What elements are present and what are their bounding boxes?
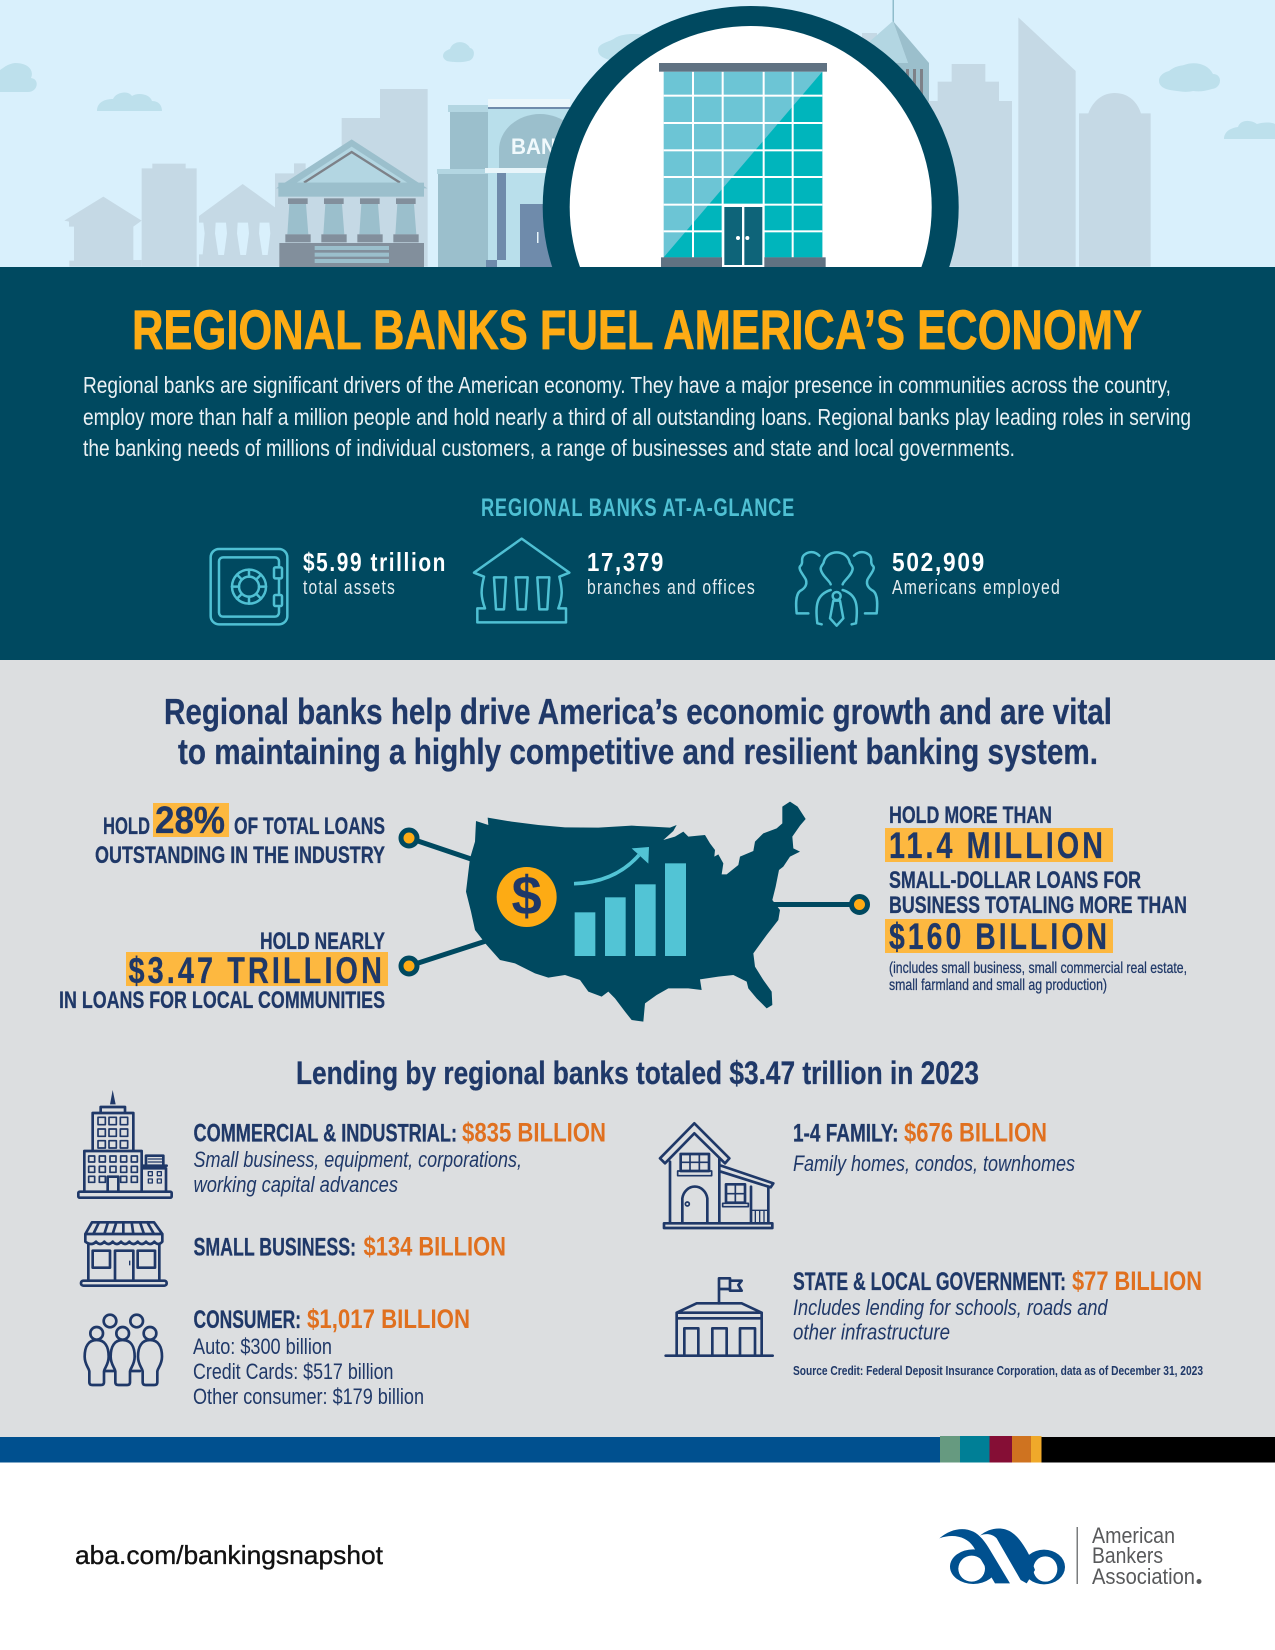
callout: 11.4 million small-dollar loans: small farmland and small ag production) [889, 977, 1107, 994]
icon: consumers [85, 1315, 162, 1385]
label: consumer: Auto: $300 billion [193, 1334, 332, 1359]
silhouettes: right buildings [928, 17, 1151, 267]
logo: American Bankers Association [939, 1523, 1202, 1589]
callout: 11.4 million small-dollar loans: HOLD MORE THAN [889, 802, 1052, 829]
label: consumer: Other consumer: $179 billion [193, 1384, 424, 1409]
icon: BANK building [437, 99, 581, 267]
callout: 28 percent: OF TOTAL LOANS [234, 813, 385, 840]
label: consumer: $1,017 BILLION [307, 1304, 470, 1334]
stat: total assets: $5.99 trillion [303, 547, 447, 577]
silhouettes: left buildings [64, 89, 428, 267]
icon: safe [211, 549, 287, 624]
callout: 11.4 million small-dollar loans: 11.4 MILLION [889, 825, 1106, 866]
icon: classical bank building [276, 139, 427, 267]
logo: American Bankers Association: Bankers [1092, 1543, 1163, 1568]
connector lines [401, 830, 868, 974]
callout: 11.4 million small-dollar loans: $160 BILLION [889, 916, 1110, 957]
label: consumer: Credit Cards: $517 billion [193, 1359, 394, 1384]
stat: branches [587, 547, 756, 599]
clouds [0, 34, 1275, 139]
icon: bank branch [474, 539, 569, 622]
panel: gray content [0, 660, 1275, 1437]
label: small business: $134 BILLION [364, 1232, 506, 1262]
label: state and local government: other infrastructure [793, 1320, 950, 1344]
label: state and local government: Includes lending for schools, roads and [793, 1295, 1108, 1320]
callout: 3.47 trillion: IN LOANS FOR LOCAL COMMUNITIES [59, 987, 385, 1014]
icon: BANK building: BANK [511, 134, 571, 159]
icon: office building [78, 1090, 172, 1198]
callout: 28 percent: 28% [155, 800, 225, 842]
stat: total assets: total assets [303, 577, 396, 599]
heading: lending total: Lending by regional banks totaled $3.47 trillion in 2023 [296, 1055, 979, 1091]
label: 1-4 family: 1-4 FAMILY: [793, 1120, 898, 1148]
label: commercial and industrial: COMMERCIAL & INDUSTRIAL: [194, 1120, 457, 1148]
icon: government building [666, 1278, 773, 1356]
circle frame [543, 6, 959, 408]
footer url: aba.com/bankingsnapshot [75, 1540, 384, 1570]
label: commercial and industrial: working capital advances [194, 1172, 398, 1197]
stat: total assets [303, 547, 447, 599]
stat: employed [892, 547, 1061, 599]
callout: 11.4 million small-dollar loans [885, 802, 1187, 994]
logo: American Bankers Association: American [1092, 1523, 1175, 1548]
label: commercial and industrial [194, 1118, 606, 1197]
callout: 11.4 million small-dollar loans: (includes small business, small commercial real estate, [889, 960, 1187, 977]
icon: glass office tower [659, 63, 827, 267]
label: consumer: CONSUMER: [194, 1306, 301, 1334]
icon: people [796, 552, 877, 626]
intro paragraph: the banking needs of millions of individual customers, a range of businesses and state and local governments. [83, 435, 1015, 461]
label: 1-4 family: $676 BILLION [904, 1118, 1047, 1148]
US map [466, 802, 806, 1022]
panel: dark intro band [0, 267, 1275, 660]
callout: 28 percent [95, 800, 385, 869]
heading: economic growth: to maintaining a highly competitive and resilient banking system. [178, 731, 1098, 772]
label: 1-4 family: Family homes, condos, townhomes [793, 1151, 1075, 1176]
stat: employed: 502,909 [892, 547, 986, 577]
callout: 3.47 trillion: HOLD NEARLY [260, 928, 385, 955]
callout: 3.47 trillion: $3.47 TRILLION [128, 950, 385, 991]
bar chart with growth arrow [574, 847, 686, 956]
color bar [0, 1436, 1275, 1462]
icon: dollar coin: $ [512, 864, 542, 926]
label: state and local government [793, 1266, 1202, 1344]
label: small business: SMALL BUSINESS: [194, 1234, 356, 1262]
intro paragraph [83, 372, 1191, 461]
panel: hero skyline [0, 0, 1275, 408]
icon: storefront [81, 1222, 167, 1286]
label: state and local government: $77 BILLION [1072, 1266, 1202, 1296]
label: state and local government: STATE & LOCAL GOVERNMENT: [793, 1268, 1066, 1296]
logo: American Bankers Association: Association [1092, 1564, 1195, 1589]
label: 1-4 family [793, 1118, 1075, 1176]
logo mark [939, 1529, 1065, 1584]
heading: economic growth [164, 691, 1112, 772]
icon: tower with spire [860, 0, 929, 105]
callout: 3.47 trillion [59, 928, 388, 1014]
label: commercial and industrial: Small business, equipment, corporations, [194, 1147, 522, 1172]
heading: at-a-glance: REGIONAL BANKS AT-A-GLANCE [481, 494, 795, 522]
callout: 28 percent: HOLD [103, 813, 150, 840]
callout: 28 percent: OUTSTANDING IN THE INDUSTRY [95, 842, 385, 869]
label: consumer [193, 1304, 470, 1409]
icon: dollar coin [497, 864, 557, 927]
stat: employed: Americans employed [892, 577, 1061, 599]
icon: house [660, 1123, 773, 1228]
label: small business [194, 1232, 506, 1262]
label: commercial and industrial: $835 BILLION [462, 1118, 606, 1148]
stat: branches: 17,379 [587, 547, 665, 577]
stat: branches: branches and offices [587, 577, 756, 599]
callout: 11.4 million small-dollar loans: SMALL-DOLLAR LOANS FOR [889, 867, 1141, 894]
